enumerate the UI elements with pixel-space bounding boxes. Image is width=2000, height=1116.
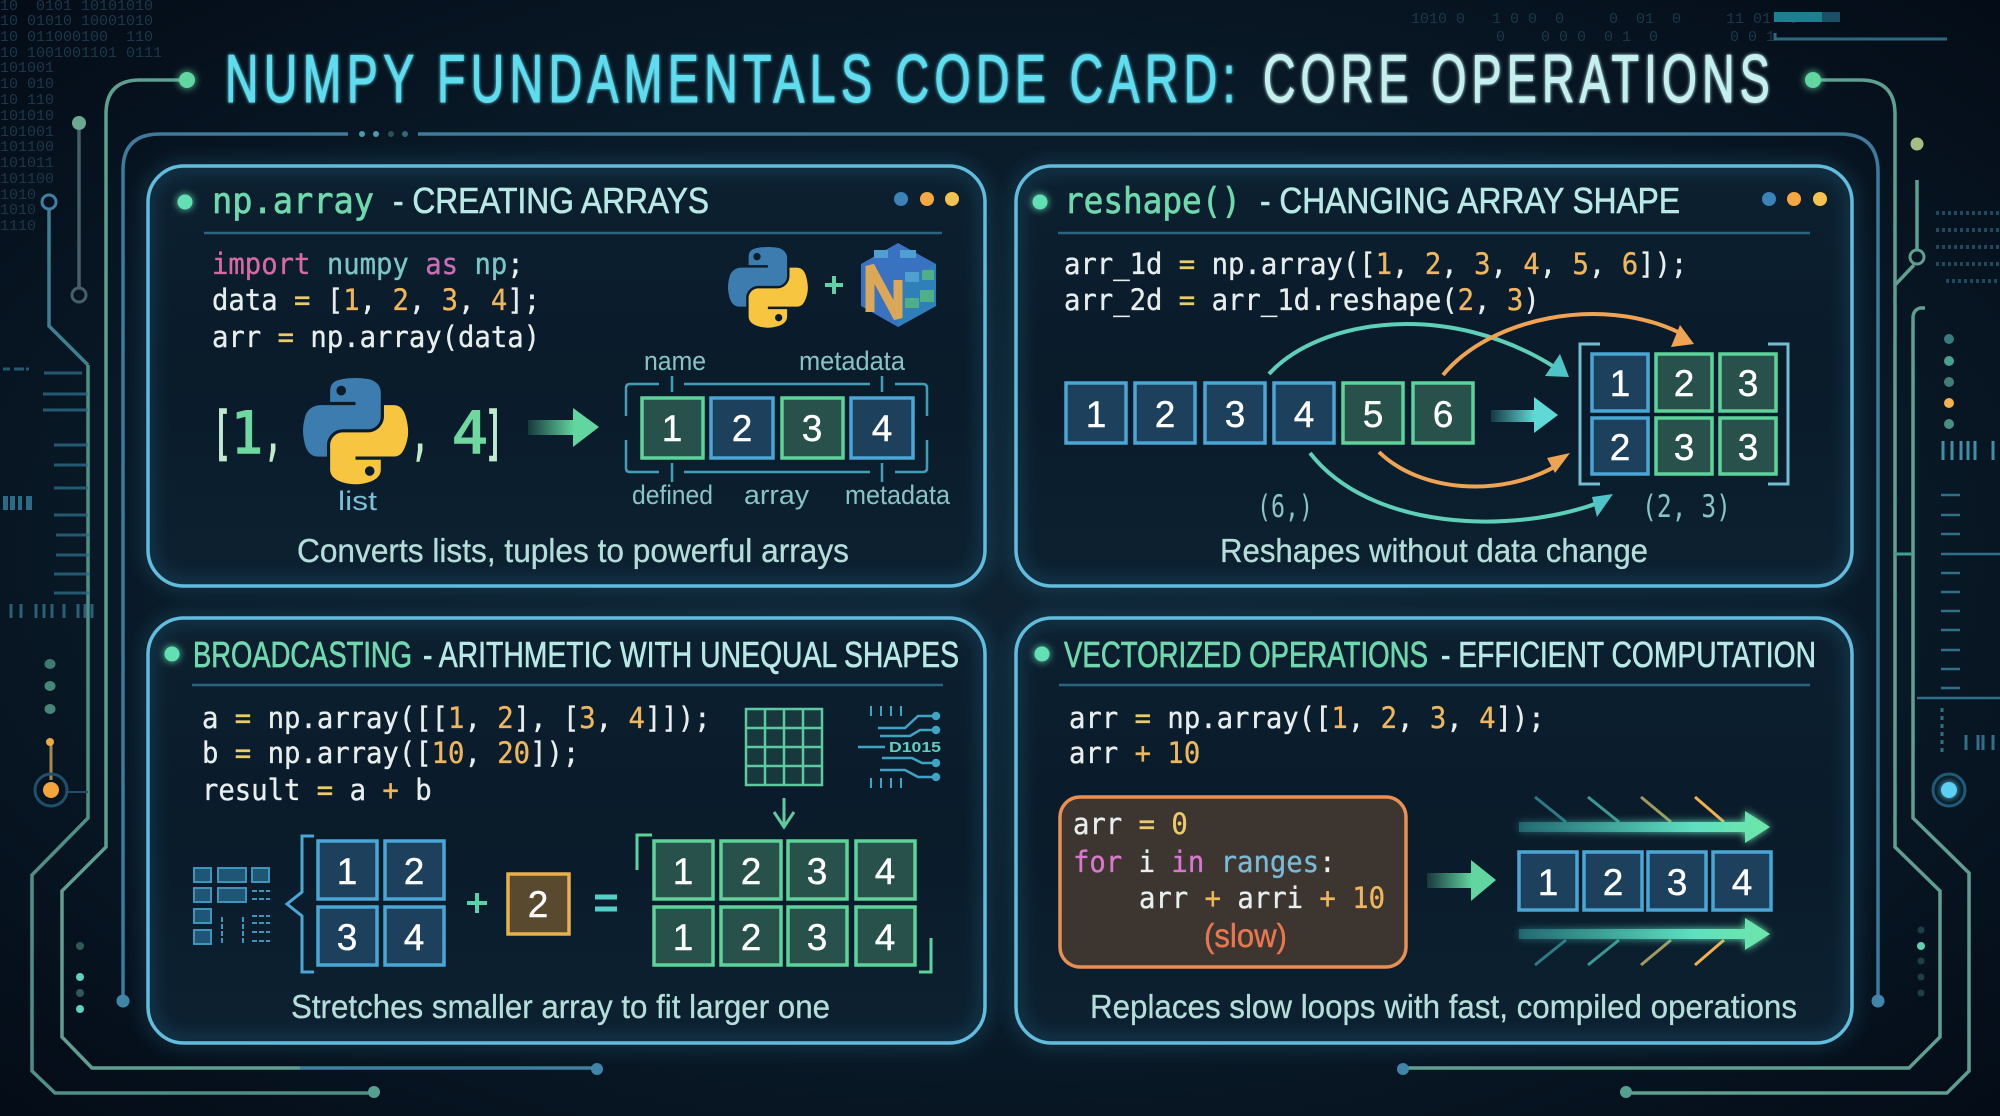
matrix a: 2 — [404, 851, 424, 892]
code block — [212, 247, 540, 354]
reshaped matrix — [1592, 354, 1776, 474]
code block: arr_1d = np.array([1, 2, 3, 4, 5, 6]); — [1064, 247, 1687, 282]
code block: result = a + b — [202, 773, 432, 807]
flat array — [1066, 383, 1473, 443]
binary pattern top left: 101100 — [0, 139, 54, 156]
matrix a — [318, 841, 444, 965]
binary pattern top left: 101010 — [0, 108, 54, 125]
binary pattern top left: 10 110 — [0, 92, 54, 109]
binary pattern top left: 101100 — [0, 171, 54, 188]
panel: broadcasting — [148, 618, 985, 1043]
circuit traces right — [1397, 72, 1969, 1098]
array labels: array — [744, 480, 810, 510]
code block — [1064, 247, 1687, 318]
heading: reshape() — [1064, 181, 1241, 222]
fast arrow top — [1519, 797, 1770, 843]
reshaped matrix: 3 — [1674, 427, 1694, 468]
binary pattern top left: 10 011000100 110 — [0, 29, 153, 46]
window dots — [894, 192, 959, 206]
binary pattern top right: 1010 0 1 0 0 0 0 01 0 11 01 0 — [1411, 11, 1798, 28]
binary pattern top left: 101001 — [0, 60, 54, 77]
result matrix: 2 — [741, 851, 761, 892]
result matrix: 2 — [741, 917, 761, 958]
array brackets — [626, 376, 927, 482]
shape labels: (6,) — [1257, 489, 1313, 525]
array cells: 3 — [802, 408, 822, 449]
heading bullet — [178, 194, 192, 210]
list literal: , — [264, 399, 282, 467]
code block — [202, 701, 711, 807]
binary pattern top left — [0, 0, 162, 235]
flat array: 6 — [1433, 394, 1453, 435]
heading — [1064, 634, 1816, 675]
list literal — [212, 399, 504, 467]
array labels: name — [644, 346, 706, 376]
flat array: 5 — [1363, 394, 1383, 435]
list literal: [ — [212, 399, 232, 467]
result matrix: 3 — [807, 917, 827, 958]
flat array: 3 — [1225, 394, 1245, 435]
plus sign — [467, 893, 487, 913]
heading bullet — [1034, 646, 1050, 662]
arrow down — [774, 798, 794, 827]
matrix brackets — [1580, 344, 1788, 484]
icon: python logo large — [303, 378, 408, 484]
scalar box: 2 — [528, 884, 548, 925]
binary pattern top left: 10 1001001101 0111 — [0, 45, 162, 62]
window dots — [1762, 192, 1827, 206]
flat array: 1 — [1086, 394, 1106, 435]
result array: 4 — [1732, 862, 1752, 903]
slow loop box: arr + arri + 10 — [1139, 881, 1385, 915]
arrow — [1491, 397, 1558, 433]
array labels: metadata — [799, 346, 906, 376]
heading: - ARITHMETIC WITH UNEQUAL SHAPES — [423, 634, 959, 675]
slow loop box: (slow) — [1204, 917, 1287, 954]
code block: arr = np.array([1, 2, 3, 4]); — [1069, 701, 1545, 735]
scalar box — [508, 874, 569, 934]
binary pattern top left: 1010 — [0, 187, 36, 204]
heading: VECTORIZED OPERATIONS — [1064, 634, 1428, 675]
array cells: 2 — [732, 408, 752, 449]
caption: Reshapes without data change — [1220, 532, 1648, 569]
matrix a: 4 — [404, 917, 424, 958]
list literal: , — [411, 399, 429, 467]
list label: list — [338, 486, 378, 516]
icon: circuit — [858, 706, 941, 788]
reshaped matrix: 1 — [1610, 363, 1630, 404]
heading: - CREATING ARRAYS — [393, 180, 709, 221]
result array: 2 — [1603, 862, 1623, 903]
array labels — [632, 346, 951, 510]
reshaped matrix: 3 — [1738, 363, 1758, 404]
code block: arr + 10 — [1069, 736, 1200, 770]
arrow — [1427, 860, 1496, 901]
code block: import numpy as np; — [212, 247, 524, 281]
heading — [1064, 180, 1680, 222]
icon: circuit: D1015 — [889, 739, 941, 756]
code block — [1069, 701, 1545, 770]
array cells: 4 — [872, 408, 892, 449]
code block: a = np.array([[1, 2], [3, 4]]); — [202, 701, 711, 735]
heading: - EFFICIENT COMPUTATION — [1441, 634, 1816, 675]
result matrix: 1 — [673, 851, 693, 892]
result array — [1519, 852, 1771, 910]
array cells: 1 — [662, 408, 682, 449]
code block: arr_2d = arr_1d.reshape(2, 3) — [1064, 283, 1540, 318]
slow loop box — [1060, 797, 1406, 967]
flat array: 4 — [1294, 394, 1314, 435]
panel: np.array — [148, 166, 985, 586]
heading bullet — [164, 646, 180, 662]
caption: Stretches smaller array to fit larger one — [291, 988, 830, 1025]
icon: grid — [746, 709, 822, 785]
binary pattern top left: 10 01010 10001010 — [0, 13, 153, 30]
reshaped matrix: 2 — [1610, 427, 1630, 468]
heading: - CHANGING ARRAY SHAPE — [1260, 180, 1680, 221]
curly bracket — [287, 836, 314, 972]
caption: Replaces slow loops with fast, compiled operations — [1090, 988, 1797, 1025]
binary pattern top left: 101001 — [0, 124, 54, 141]
result array: 1 — [1538, 862, 1558, 903]
shape labels — [1257, 489, 1731, 525]
code block: b = np.array([10, 20]); — [202, 736, 579, 770]
binary pattern top right — [1411, 11, 1947, 46]
result matrix: 4 — [875, 851, 895, 892]
result matrix: 3 — [807, 851, 827, 892]
heading: BROADCASTING — [193, 634, 412, 675]
title: NUMPY FUNDAMENTALS CODE CARD: — [225, 41, 1241, 117]
result matrix: 4 — [875, 917, 895, 958]
binary pattern top left: 101011 — [0, 155, 54, 172]
code block: data = [1, 2, 3, 4]; — [212, 283, 540, 317]
panel: vectorized operations — [1016, 618, 1852, 1043]
slow loop box: for i in ranges: — [1073, 845, 1335, 879]
binary pattern top left: 1110 — [0, 218, 36, 235]
binary pattern top left: 10 010 — [0, 76, 54, 93]
list literal: 1 — [231, 399, 263, 467]
binary pattern top right: 0 0 0 0 0 1 0 0 0 1 — [1496, 29, 1775, 46]
array cells — [642, 398, 913, 458]
equals sign — [595, 897, 617, 909]
matrix a: 3 — [337, 917, 357, 958]
right side decorations — [1917, 213, 2000, 996]
heading — [193, 634, 959, 675]
flat array: 2 — [1155, 394, 1175, 435]
slow loop box: arr = 0 — [1073, 807, 1188, 841]
flow arrows — [1269, 314, 1694, 522]
reshaped matrix: 3 — [1738, 427, 1758, 468]
panel: reshape — [1016, 166, 1852, 586]
reshaped matrix: 2 — [1674, 363, 1694, 404]
heading: np.array — [212, 181, 374, 222]
binary pattern top left: 1010 — [0, 202, 36, 219]
result brackets — [637, 835, 931, 972]
caption: Converts lists, tuples to powerful arrays — [297, 532, 849, 569]
code block: arr = np.array(data) — [212, 320, 540, 354]
icon: numpy cube — [861, 243, 936, 327]
heading — [212, 180, 709, 222]
plus sign — [825, 276, 843, 294]
heading bullet — [1032, 194, 1048, 210]
fast arrow bottom — [1519, 918, 1770, 965]
matrix a: 1 — [337, 851, 357, 892]
array labels: defined — [632, 480, 713, 510]
shape labels: (2, 3) — [1642, 489, 1731, 525]
icon: table — [194, 868, 270, 944]
arrow — [528, 408, 599, 447]
array labels: metadata — [845, 480, 951, 510]
left side decorations — [3, 369, 92, 1013]
list literal: 4 — [452, 399, 488, 467]
result matrix — [654, 841, 915, 965]
list literal: ] — [484, 399, 504, 467]
result matrix: 1 — [673, 917, 693, 958]
result array: 3 — [1667, 862, 1687, 903]
icon: python logo small — [728, 247, 808, 328]
